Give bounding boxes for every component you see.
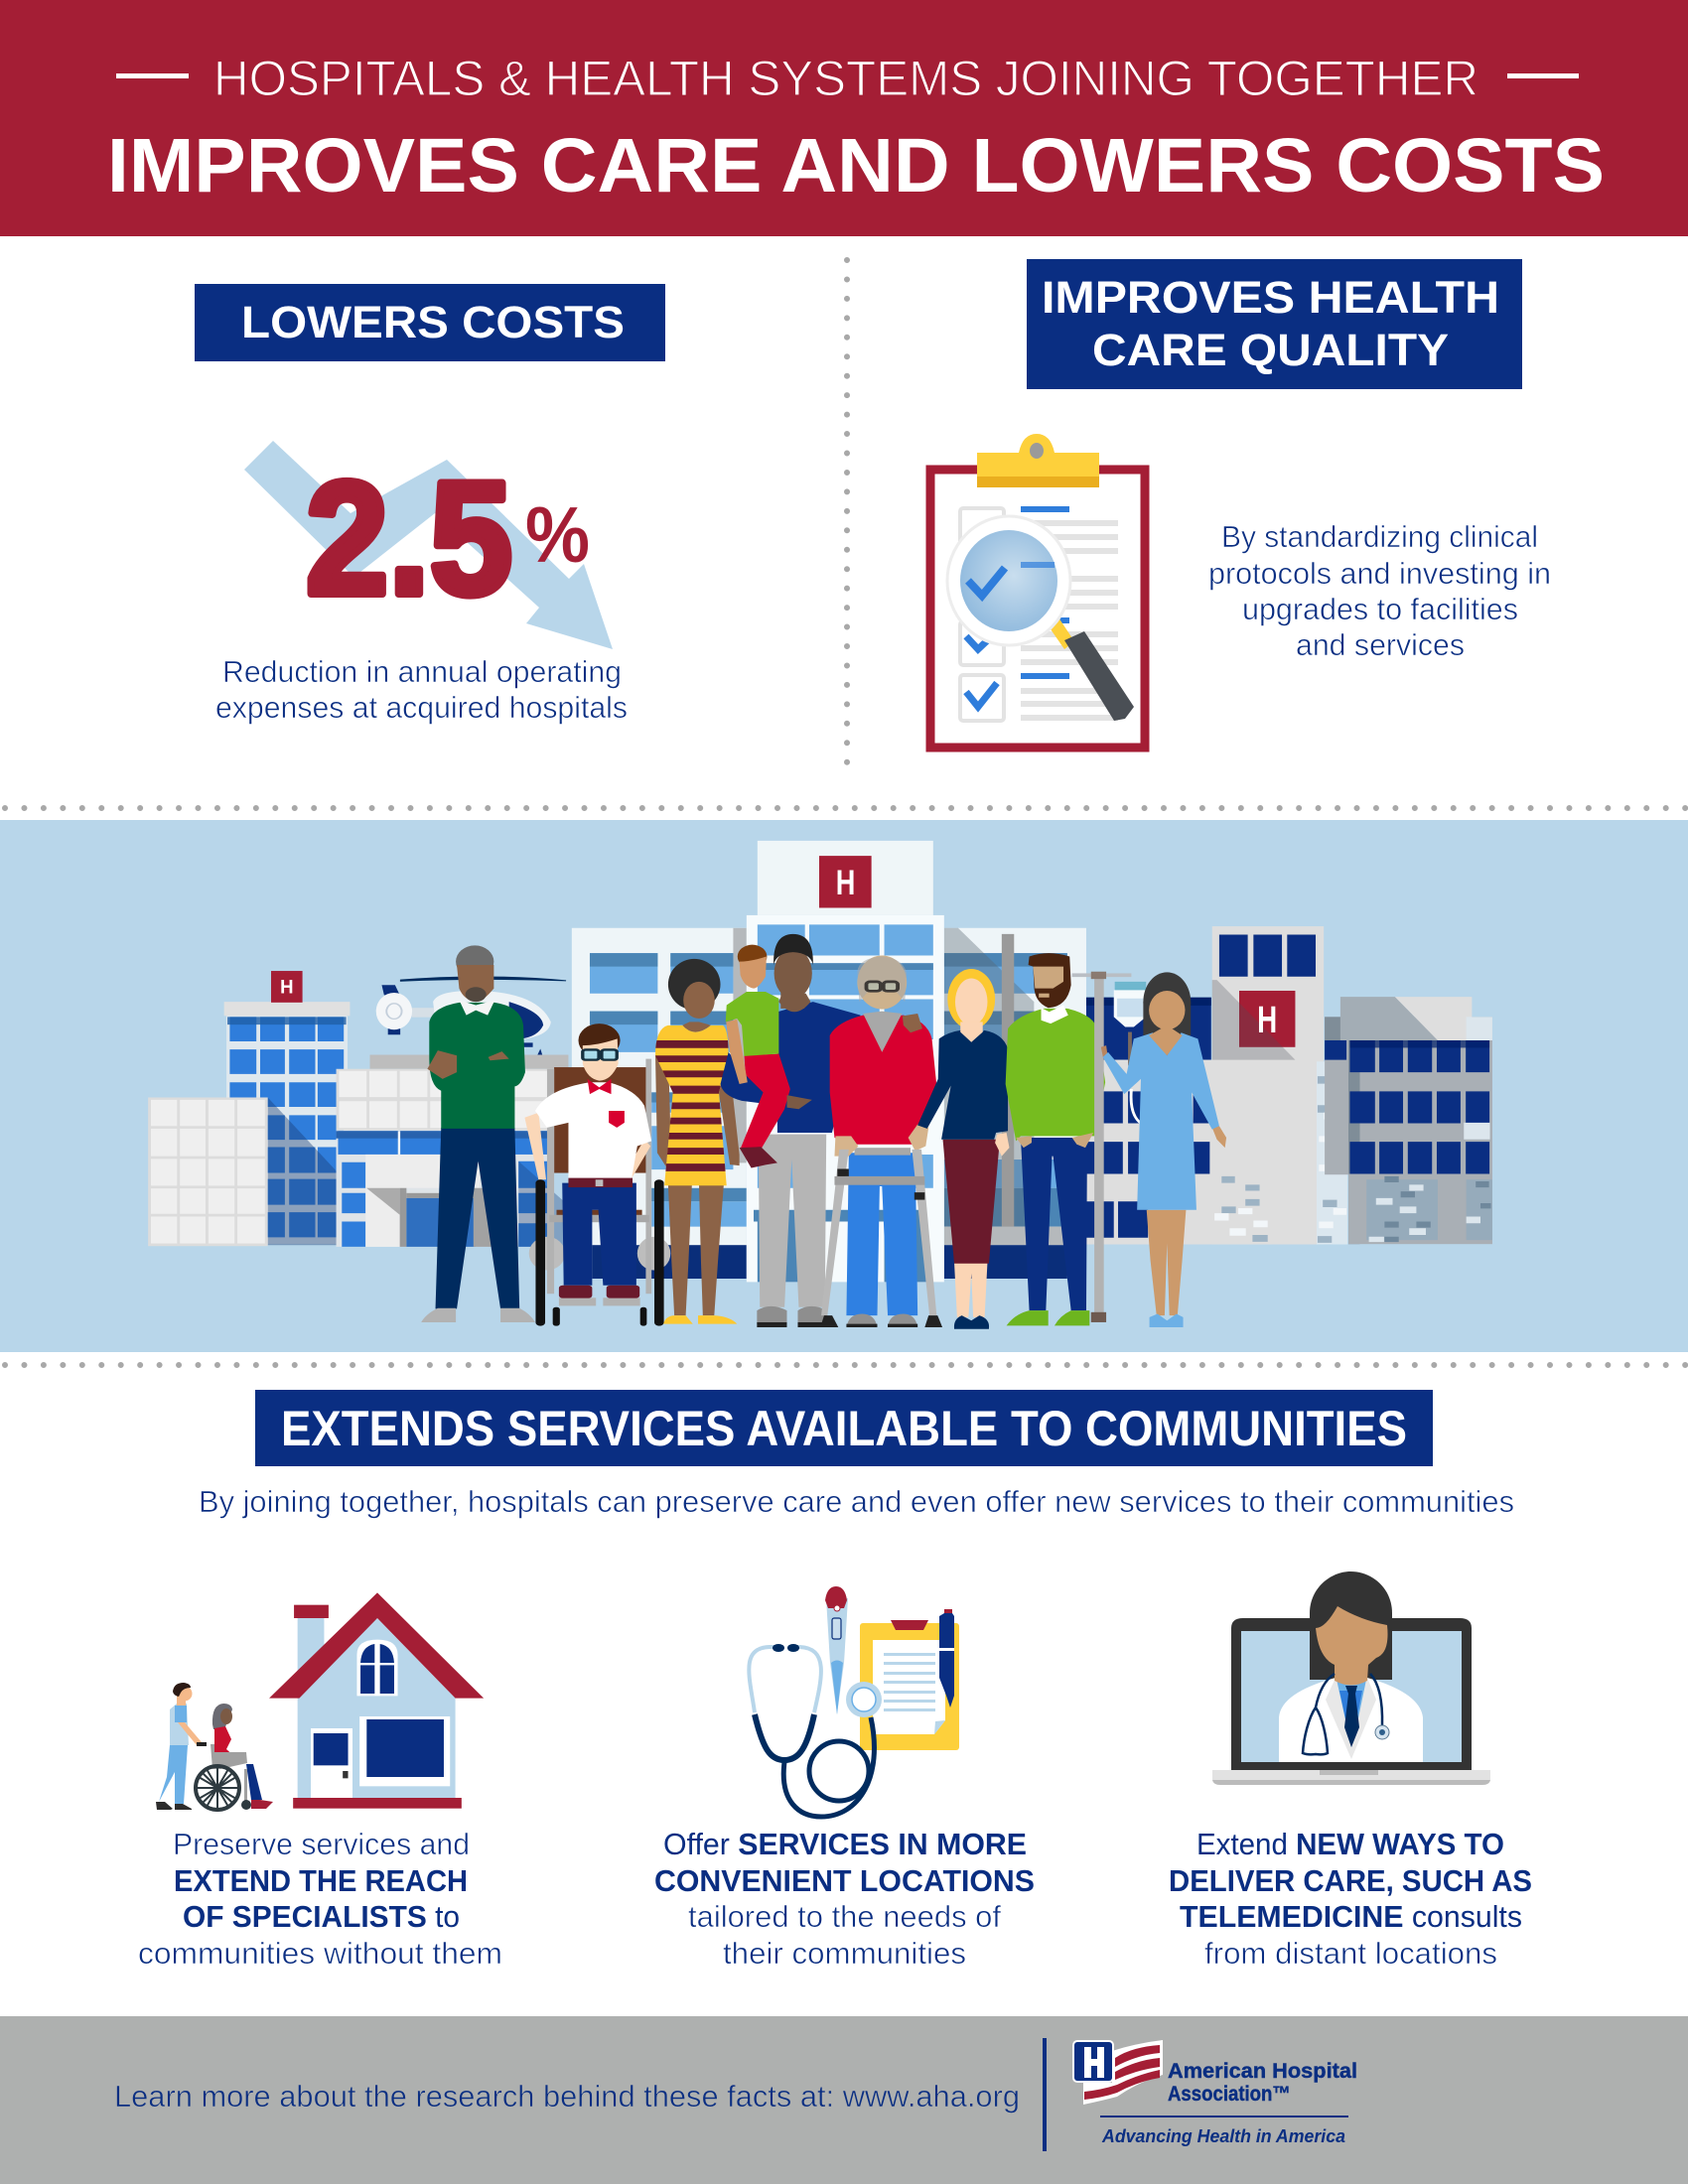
helicopter <box>376 977 566 1055</box>
vertical dotted divider <box>844 260 850 766</box>
building: left white block <box>148 1097 268 1246</box>
building: right hospital: H <box>1257 999 1277 1040</box>
text: services in more convenient locations: Offer SERVICES IN MORE <box>663 1827 1027 1861</box>
text: services subtitle: By joining together, hospitals can preserve care and even offer new services to their communities <box>199 1484 1514 1519</box>
person: man in green sweater <box>421 945 535 1322</box>
text: services in more convenient locations: their communities <box>723 1936 966 1971</box>
icon: telemedicine laptop with doctor <box>1212 1571 1490 1785</box>
text: telemedicine: DELIVER CARE, SUCH AS <box>1169 1863 1532 1898</box>
building: centre main hospital: H <box>836 864 855 902</box>
text: standardizing protocols: and services <box>1296 627 1465 662</box>
text: extend the reach of specialists: Preserve services and <box>173 1827 470 1861</box>
building: left hospital tower: H <box>280 977 294 999</box>
heading: extends services: EXTENDS SERVICES AVAILABLE TO COMMUNITIES <box>281 1401 1407 1456</box>
header subtitle: HOSPITALS & HEALTH SYSTEMS JOINING TOGETHER <box>213 51 1478 106</box>
panel: footer <box>0 2016 1688 2184</box>
person: man in wheelchair <box>524 1024 670 1326</box>
text: standardizing protocols: protocols and investing in <box>1208 556 1551 591</box>
text: reduction description: Reduction in annual operating <box>222 654 622 689</box>
heading: extends services <box>255 1390 1433 1466</box>
panel: hero illustration <box>0 820 1688 1352</box>
person: woman in blue dress <box>1101 972 1226 1327</box>
heading: lowers costs <box>195 284 665 361</box>
heading: lowers costs: LOWERS COSTS <box>241 297 625 347</box>
person: father carrying child <box>721 934 861 1327</box>
icon: clipboard with magnifier <box>930 434 1145 748</box>
person: blonde woman <box>917 969 1009 1329</box>
text: services in more convenient locations: tailored to the needs of <box>688 1899 1001 1934</box>
text: telemedicine: Extend NEW WAYS TO <box>1196 1827 1504 1861</box>
building: far right block <box>1325 997 1492 1244</box>
text: reduction description: expenses at acquired hospitals <box>215 690 628 725</box>
text: extend the reach of specialists <box>138 1827 502 1971</box>
heading: improves health care quality: CARE QUALITY <box>1092 325 1449 375</box>
building: right hospital <box>1086 926 1347 1245</box>
text: extend the reach of specialists: EXTEND THE REACH <box>174 1863 468 1898</box>
text: reduction description <box>215 654 628 725</box>
person: older man with walker <box>820 955 942 1327</box>
text: services in more convenient locations <box>654 1827 1035 1971</box>
text: telemedicine: from distant locations <box>1204 1936 1497 1971</box>
building: centre left wing <box>572 928 747 1279</box>
panel: extends services <box>138 1390 1532 1971</box>
heading: improves health care quality <box>1027 259 1522 389</box>
text: extend the reach of specialists: communities without them <box>138 1936 502 1971</box>
person: woman in striped dress <box>651 959 740 1324</box>
building: low middle wing <box>337 1055 568 1247</box>
text: standardizing protocols: upgrades to facilities <box>1242 592 1518 626</box>
person: bearded man in green sweater <box>1006 953 1105 1325</box>
text: services in more convenient locations: CONVENIENT LOCATIONS <box>654 1863 1035 1898</box>
panel: improves health care quality <box>930 259 1551 748</box>
building: centre right wing <box>944 928 1086 1279</box>
building: left hospital tower <box>224 971 350 1245</box>
statistic: 2.5 percent: 2.5 <box>306 449 512 628</box>
icon: downward arrow <box>244 441 613 649</box>
logo: American Hospital Association: American Hospital <box>1168 2060 1357 2083</box>
text: extend the reach of specialists: OF SPECIALISTS to <box>183 1899 460 1934</box>
logo: American Hospital Association: Advancing Health in America <box>1101 2126 1345 2146</box>
text: standardizing protocols <box>1208 519 1551 662</box>
heading: improves health care quality: IMPROVES HEALTH <box>1042 272 1499 323</box>
medical IV stand <box>1072 972 1146 1322</box>
icon: stethoscope, thermometer and clipboard <box>749 1586 959 1817</box>
main title: IMPROVES CARE AND LOWERS COSTS <box>107 123 1605 208</box>
text: telemedicine <box>1169 1827 1532 1971</box>
statistic: 2.5 percent: % <box>525 490 590 579</box>
building: centre main hospital <box>747 841 944 1282</box>
text: learn more link: Learn more about the research behind these facts at: www.aha.org <box>114 2079 1020 2114</box>
logo: American Hospital Association <box>1072 2040 1357 2146</box>
panel: lowers costs <box>195 284 665 725</box>
logo: American Hospital Association: Association™ <box>1168 2083 1291 2106</box>
panel: header banner <box>0 0 1688 236</box>
text: telemedicine: TELEMEDICINE consults <box>1180 1899 1522 1934</box>
text: standardizing protocols: By standardizing clinical <box>1221 519 1538 554</box>
icon: house with wheelchair user <box>156 1592 484 1810</box>
